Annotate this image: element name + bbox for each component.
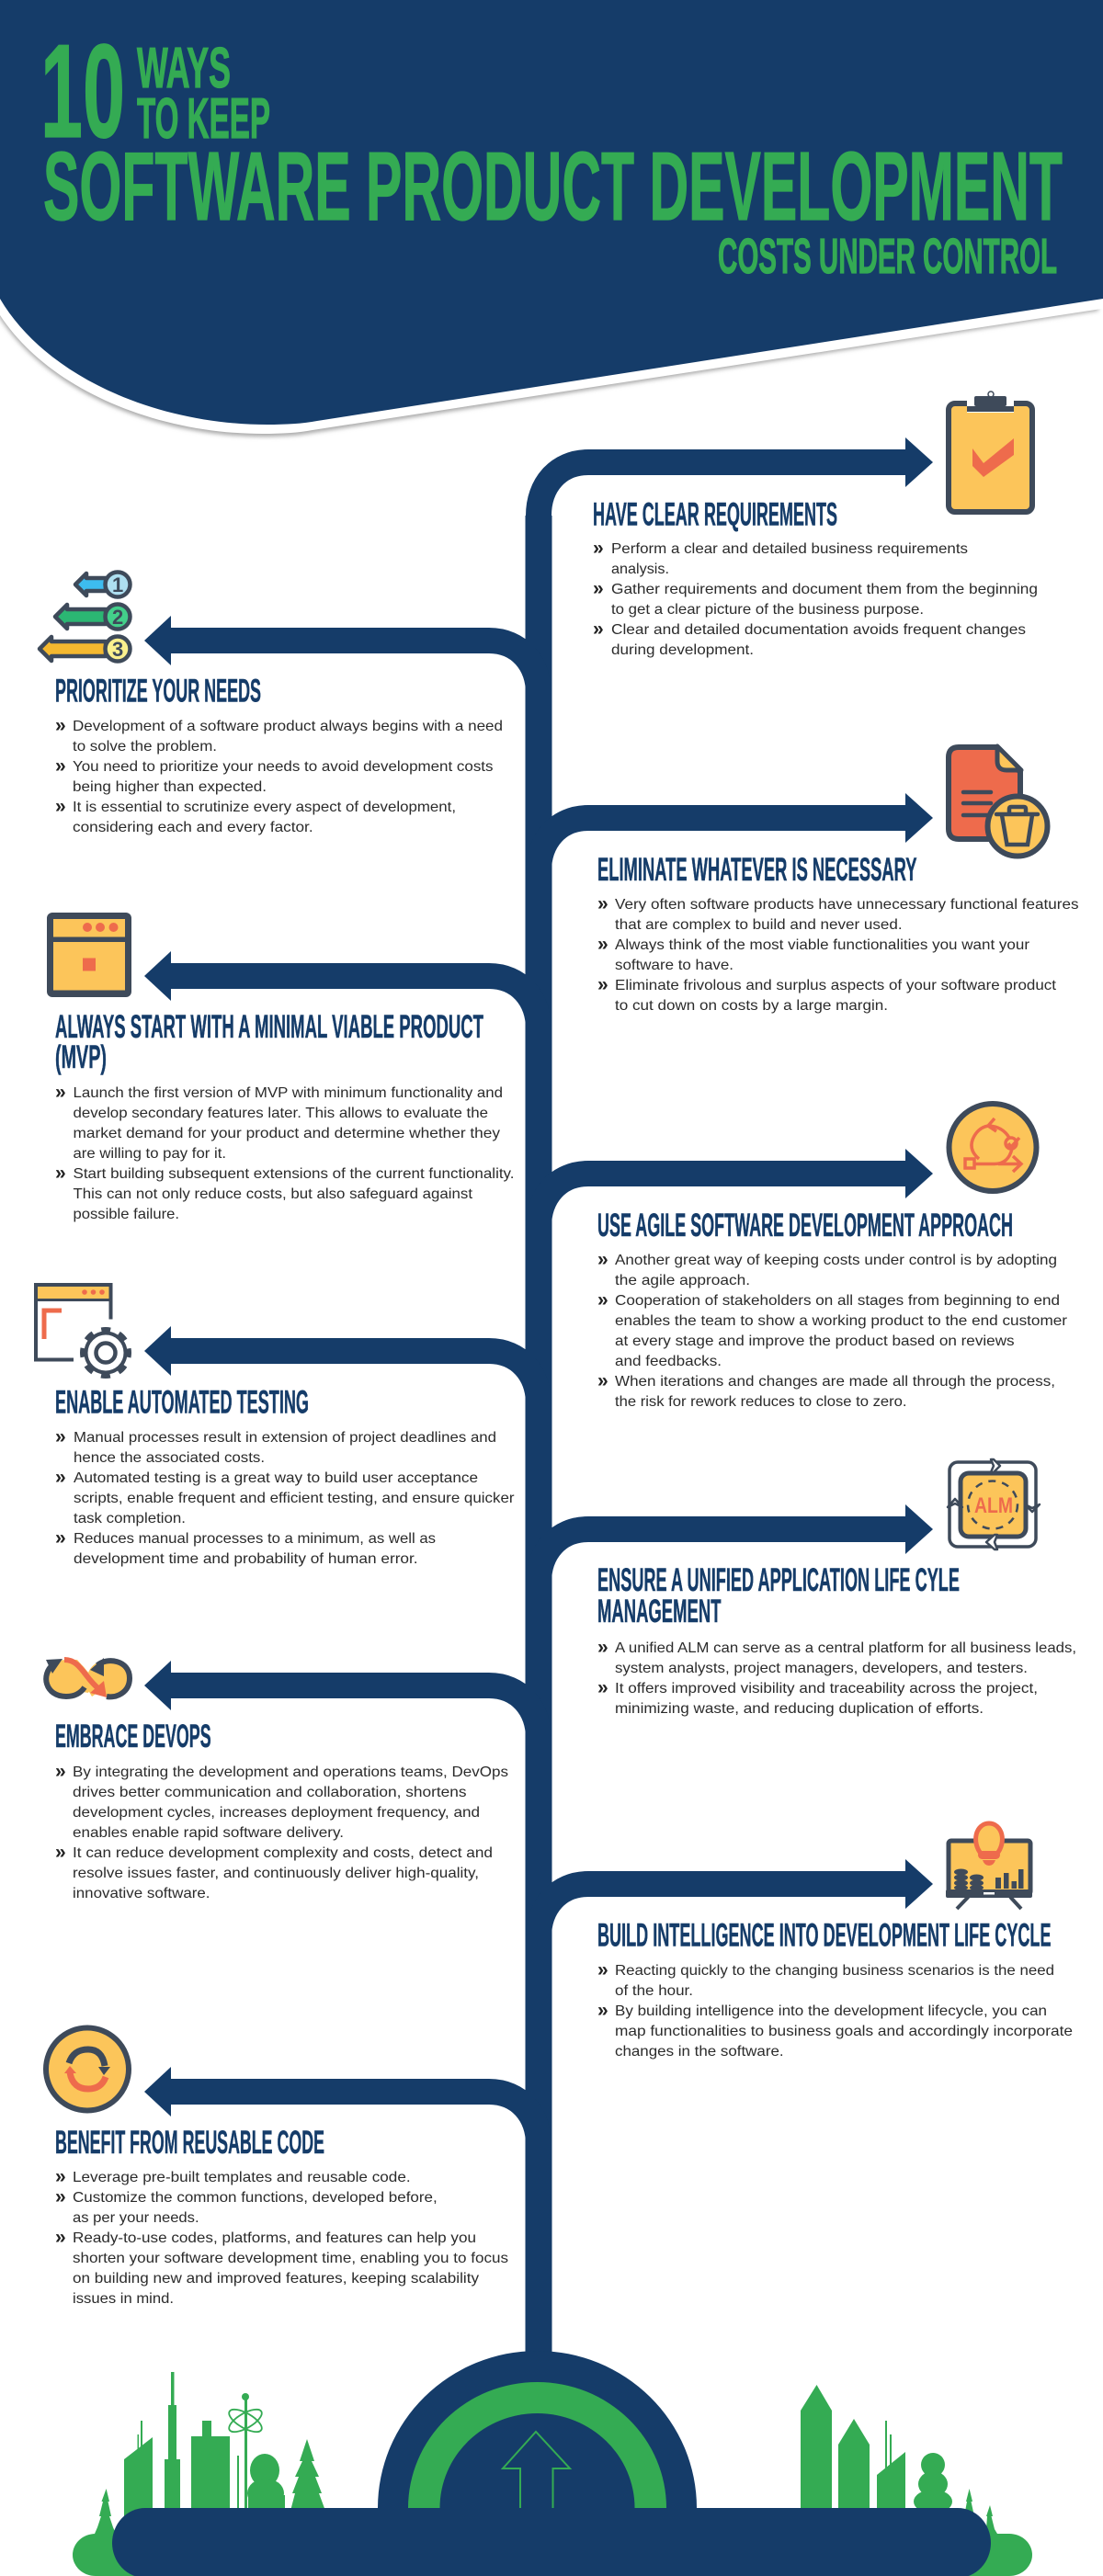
- text block: [597, 1249, 1068, 1410]
- text block: considering each and every factor.: [73, 820, 313, 835]
- text block: Always think of the most viable functionalities you want your: [615, 937, 1030, 953]
- text block: changes in the software.: [615, 2044, 784, 2060]
- text block: during development.: [611, 642, 754, 658]
- text block: Eliminate frivolous and surplus aspects of your software product: [615, 978, 1057, 993]
- heading: EMBRACE DEVOPS: [55, 1719, 211, 1754]
- text block: as per your needs.: [73, 2210, 199, 2226]
- panel: unified application life cycle management: [597, 1459, 1076, 1717]
- icon: numbered arrows: [40, 572, 131, 662]
- panel: minimal viable product: [47, 913, 515, 1222]
- text block: develop secondary features later. This allows to evaluate the: [74, 1106, 488, 1121]
- icon: ALM: ALM: [974, 1493, 1013, 1518]
- arrow: branch to build intelligence: [539, 1859, 933, 1937]
- text block: development time and probability of human error.: [74, 1551, 418, 1567]
- text block: [55, 1082, 515, 1222]
- text block: [593, 538, 1038, 658]
- text block: [55, 1761, 508, 1901]
- footer base: [112, 2508, 991, 2576]
- text block: [597, 893, 1079, 1014]
- icon: clipboard: [949, 392, 1032, 512]
- text block: »: [597, 1637, 608, 1658]
- text block: to cut down on costs by a large margin.: [615, 998, 888, 1014]
- header banner: [0, 0, 1103, 437]
- text block: This can not only reduce costs, but also safeguard against: [74, 1186, 473, 1202]
- icon: numbered arrows: 1: [112, 573, 123, 596]
- text block: »: [597, 934, 608, 955]
- text block: scripts, enable frequent and efficient testing, and ensure quicker: [74, 1491, 515, 1506]
- arrow: branch to automated testing: [144, 1326, 539, 1404]
- text block: Automated testing is a great way to build user acceptance: [74, 1470, 478, 1486]
- text block: »: [597, 1249, 608, 1270]
- icon: agile cycle: [949, 1104, 1037, 1191]
- text block: »: [597, 1959, 608, 1980]
- text block: Clear and detailed documentation avoids frequent changes: [611, 622, 1026, 638]
- text block: Start building subsequent extensions of the current functionality.: [74, 1166, 515, 1182]
- text block: development cycles, increases deployment frequency, and: [73, 1805, 480, 1821]
- heading: ENABLE AUTOMATED TESTING: [55, 1384, 309, 1421]
- text block: Perform a clear and detailed business requirements: [611, 541, 968, 557]
- text block: »: [597, 1677, 608, 1698]
- text block: issues in mind.: [73, 2291, 174, 2307]
- text block: »: [593, 618, 604, 640]
- title: to keep: TO KEEP: [137, 87, 270, 151]
- text block: [597, 1959, 1073, 2060]
- heading: HAVE CLEAR REQUIREMENTS: [593, 496, 837, 533]
- text block: task completion.: [74, 1511, 186, 1526]
- text block: »: [55, 1426, 66, 1447]
- text block: shorten your software development time, enabling you to focus: [73, 2251, 508, 2266]
- icon: window and gear: [36, 1285, 129, 1377]
- text block: the risk for rework reduces to close to zero.: [615, 1394, 906, 1410]
- panel: prioritize your needs: [40, 572, 503, 835]
- text block: »: [593, 538, 604, 559]
- text block: »: [55, 715, 66, 736]
- title: 10: 10: [40, 17, 125, 165]
- text block: market demand for your product and determine whether they: [74, 1126, 500, 1141]
- text block: »: [55, 755, 66, 777]
- text block: enables the team to show a working product to the end customer: [615, 1313, 1068, 1329]
- title: ways: WAYS: [137, 37, 231, 100]
- icon: numbered arrows: 3: [112, 638, 123, 661]
- text block: »: [593, 578, 604, 599]
- text block: system analysts, project managers, developers, and testers.: [615, 1661, 1028, 1676]
- text block: [597, 1637, 1076, 1717]
- text block: to get a clear picture of the business purpose.: [611, 602, 924, 618]
- arrow: branch to agile approach: [539, 1149, 933, 1227]
- arrow: branch to have clear requirements: [539, 437, 933, 516]
- text block: Manual processes result in extension of project deadlines and: [74, 1430, 496, 1446]
- text block: »: [597, 1289, 608, 1311]
- text block: »: [55, 1163, 66, 1184]
- text block: are willing to pay for it.: [74, 1146, 226, 1162]
- arrow: branch to embrace devops: [144, 1661, 539, 1739]
- text block: Reduces manual processes to a minimum, as well as: [74, 1531, 436, 1547]
- text block: Reacting quickly to the changing business scenarios is the need: [615, 1963, 1054, 1979]
- text block: of the hour.: [615, 1983, 693, 1999]
- text block: »: [55, 796, 66, 817]
- heading line 2: MANAGEMENT: [597, 1594, 721, 1629]
- icon: document with trash can: [949, 746, 1048, 857]
- text block: It is essential to scrutinize every aspect of development,: [73, 800, 456, 815]
- text block: minimizing waste, and reducing duplication of efforts.: [615, 1701, 984, 1717]
- text block: »: [55, 2227, 66, 2248]
- heading line 2: (MVP): [55, 1039, 107, 1075]
- text block: on building new and improved features, keeping scalability: [73, 2271, 479, 2287]
- text block: When iterations and changes are made all through the process,: [615, 1374, 1055, 1390]
- text block: »: [597, 1370, 608, 1391]
- panel: have clear requirements: [593, 392, 1038, 658]
- footer cityscape: left: [95, 2372, 325, 2534]
- heading: ALWAYS START WITH A MINIMAL VIABLE PRODUCT: [55, 1009, 483, 1045]
- text block: Cooperation of stakeholders on all stages from beginning to end: [615, 1293, 1060, 1309]
- text block: to solve the problem.: [73, 739, 217, 755]
- text block: Leverage pre-built templates and reusable code.: [73, 2170, 411, 2185]
- panel: embrace devops: [44, 1658, 508, 1901]
- text block: software to have.: [615, 958, 733, 973]
- heading: BENEFIT FROM REUSABLE CODE: [55, 2125, 324, 2161]
- footer ground: [73, 2534, 1032, 2576]
- text block: map functionalities to business goals and accordingly incorporate: [615, 2024, 1073, 2039]
- text block: possible failure.: [74, 1207, 179, 1222]
- text block: analysis.: [611, 562, 669, 577]
- text block: and feedbacks.: [615, 1354, 722, 1369]
- text block: You need to prioritize your needs to avoid development costs: [73, 759, 493, 775]
- panel: build intelligence: [597, 1823, 1073, 2060]
- arrow: branch to unified ALM: [539, 1504, 933, 1583]
- panel: eliminate whatever is necessary: [597, 746, 1079, 1014]
- footer cityscape: right: [801, 2385, 997, 2534]
- text block: [55, 2166, 508, 2307]
- text block: »: [597, 893, 608, 914]
- text block: Launch the first version of MVP with minimum functionality and: [74, 1085, 503, 1101]
- icon: numbered arrows: 2: [112, 606, 123, 629]
- text block: drives better communication and collaboration, shortens: [73, 1785, 466, 1800]
- panel: enable automated testing: [36, 1285, 515, 1567]
- icon: up arrow outline: [503, 2432, 570, 2508]
- text block: »: [55, 2186, 66, 2207]
- text block: enables enable rapid software delivery.: [73, 1825, 344, 1841]
- text block: »: [55, 1527, 66, 1549]
- panel: benefit from reusable code: [46, 2027, 508, 2307]
- text block: By integrating the development and operations teams, DevOps: [73, 1765, 508, 1780]
- text block: »: [55, 2166, 66, 2187]
- text block: Gather requirements and document them from the beginning: [611, 582, 1038, 597]
- icon: devops infinity loop: [44, 1658, 130, 1697]
- footer dome with arrow: [378, 2351, 697, 2576]
- arrow: branch to reusable code: [144, 2067, 539, 2145]
- text block: »: [597, 2000, 608, 2021]
- heading: PRIORITIZE YOUR NEEDS: [55, 673, 261, 709]
- text block: hence the associated costs.: [74, 1450, 265, 1466]
- text block: Another great way of keeping costs under control is by adopting: [615, 1253, 1057, 1268]
- text block: A unified ALM can serve as a central platform for all business leads,: [615, 1640, 1076, 1656]
- text block: It offers improved visibility and traceability across the project,: [615, 1681, 1038, 1697]
- text block: that are complex to build and never used.: [615, 917, 903, 933]
- arrow: branch to prioritize your needs: [144, 616, 539, 694]
- text block: Development of a software product always begins with a need: [73, 719, 503, 734]
- text block: »: [55, 1467, 66, 1488]
- text block: [55, 1426, 515, 1567]
- text block: Ready-to-use codes, platforms, and features can help you: [73, 2230, 476, 2246]
- icon: reuse cycle: [46, 2027, 129, 2110]
- icon: ALM: [948, 1459, 1040, 1549]
- arrow: branch to eliminate whatever is necessary: [539, 793, 933, 871]
- text block: Very often software products have unnecessary functional features: [615, 897, 1079, 913]
- text block: »: [55, 1842, 66, 1863]
- arrow: branch to minimal viable product: [144, 951, 539, 1029]
- text block: »: [55, 1761, 66, 1782]
- text block: the agile approach.: [615, 1273, 750, 1288]
- text block: »: [55, 1082, 66, 1103]
- text block: »: [597, 974, 608, 995]
- text block: It can reduce development complexity and costs, detect and: [73, 1845, 493, 1861]
- icon: monitor with light bulb: [946, 1823, 1032, 1909]
- text block: innovative software.: [73, 1886, 210, 1901]
- text block: By building intelligence into the development lifecycle, you can: [615, 2003, 1047, 2019]
- panel: agile software development: [597, 1104, 1068, 1410]
- timeline spine: [526, 516, 552, 2409]
- text block: Customize the common functions, developed before,: [73, 2190, 438, 2206]
- icon: browser window: [47, 913, 131, 997]
- text block: resolve issues faster, and continuously deliver high-quality,: [73, 1866, 479, 1881]
- text block: being higher than expected.: [73, 779, 267, 795]
- text block: [55, 715, 503, 835]
- text block: at every stage and improve the product based on reviews: [615, 1333, 1015, 1349]
